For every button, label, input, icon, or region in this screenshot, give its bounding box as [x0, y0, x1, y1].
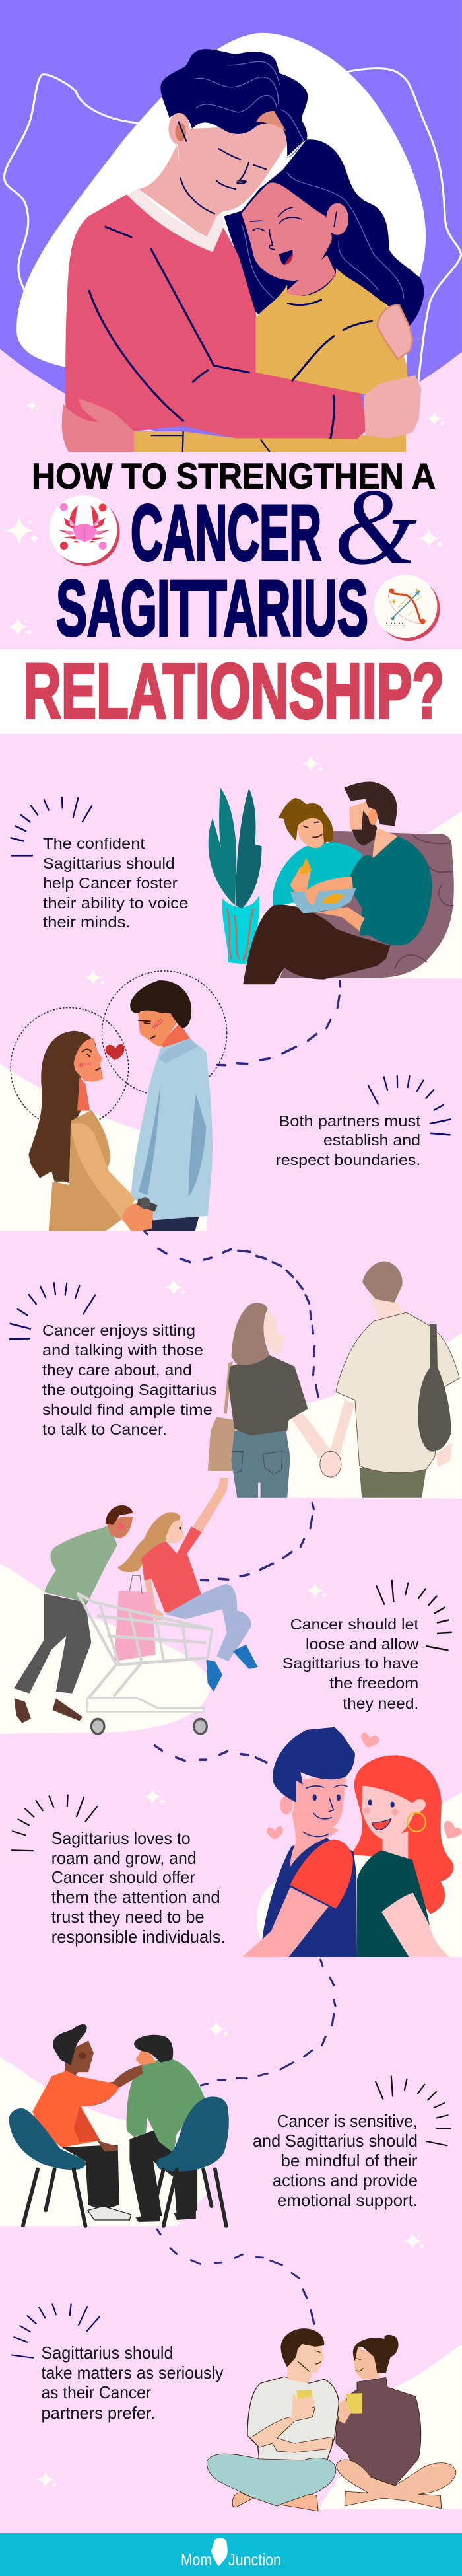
text block 4	[282, 1616, 419, 1712]
woman's sweater	[336, 2377, 421, 2486]
man's feet	[232, 2493, 318, 2511]
text block 3: Cancer enjoys sitting	[42, 1322, 195, 1339]
bow string	[388, 594, 421, 624]
man's forehead shading	[256, 111, 286, 131]
cream wave	[287, 1333, 462, 1499]
watch	[137, 1198, 158, 1212]
text block 4: they need.	[343, 1695, 418, 1712]
stray hair strand	[407, 277, 423, 323]
scene 3: couple holding hands seen from behind	[208, 1261, 462, 1499]
dashed connector 5	[201, 1960, 335, 2085]
title line 1: HOW TO STRENGTHEN A	[32, 456, 436, 497]
dashed connector 6	[157, 2229, 314, 2324]
streaks	[398, 593, 422, 616]
woman's mouth	[372, 1819, 391, 1830]
pants left	[62, 2145, 119, 2211]
man's face lines	[304, 1785, 347, 1837]
chip	[299, 858, 312, 874]
text block 6: be mindful of their	[280, 2151, 418, 2170]
text block 3	[42, 1322, 217, 1438]
hero illustration: embracing couple	[0, 0, 462, 452]
woman's neck	[382, 1831, 408, 1860]
heart	[106, 1044, 124, 1060]
bow arrow	[391, 592, 419, 619]
woman's smile	[356, 2359, 363, 2371]
woman's facial lines	[250, 207, 337, 249]
man's neck and face	[373, 828, 398, 858]
crab claws and legs	[59, 505, 110, 543]
white outline right	[343, 69, 461, 382]
man's neck	[139, 145, 227, 238]
woman's hand and mug	[346, 2393, 362, 2414]
text block 1: their minds.	[43, 913, 131, 931]
man's ear	[168, 1009, 176, 1024]
sun rays: block 2	[368, 1076, 451, 1135]
woman's top	[141, 1526, 202, 1614]
woman's arm down	[145, 1579, 164, 1621]
pot	[222, 895, 259, 964]
heart right	[444, 1821, 462, 1839]
plant leaves	[209, 787, 236, 905]
man's overalls	[262, 1837, 357, 1957]
shoe	[88, 2206, 131, 2220]
bow	[391, 590, 420, 622]
text block 2: establish and	[323, 1131, 420, 1149]
man's hair	[362, 1261, 403, 1303]
sparkle: scene 1	[301, 754, 323, 773]
right pants feet	[135, 2207, 196, 2222]
man's hair	[130, 980, 191, 1028]
text block 5: responsible individuals.	[51, 1927, 226, 1947]
man's ear	[280, 1796, 293, 1814]
pants right	[129, 2129, 197, 2219]
right chair	[156, 2096, 229, 2172]
cart base	[87, 1698, 203, 1712]
text block 7	[41, 2343, 223, 2423]
heart left	[267, 1826, 283, 1840]
text block 5: Cancer should offer	[51, 1867, 195, 1887]
man's collar	[127, 188, 223, 252]
man's shirt	[131, 1038, 213, 1220]
left person arm on shoulder	[77, 2065, 143, 2106]
woman's sweater lower	[134, 427, 406, 452]
left person hair	[53, 2024, 87, 2065]
woman's face	[298, 818, 324, 848]
text block 5: Sagittarius loves to	[51, 1828, 191, 1848]
sparkle: scene 7 bottom	[36, 2470, 58, 2489]
woman's hair	[279, 798, 333, 843]
logo icon: mother and child	[211, 2538, 228, 2566]
text block 2	[275, 1112, 421, 1168]
man's shirt	[44, 1525, 117, 1604]
man's hand on shoulder	[377, 305, 412, 359]
text block 5: them the attention and	[51, 1887, 220, 1907]
man's left arm	[330, 1400, 355, 1468]
text block 1: their ability to voice	[43, 894, 189, 912]
right person sweater	[127, 2058, 205, 2153]
man's hair	[273, 1727, 355, 1803]
scene 6: friends on chairs	[0, 2024, 229, 2226]
stars	[391, 588, 419, 604]
man's hand	[292, 2394, 315, 2417]
dotted circle right	[102, 971, 227, 1096]
text block 6: emotional support.	[277, 2190, 418, 2210]
man's arm	[242, 1887, 329, 1957]
cream wave	[257, 1791, 462, 1957]
sofa	[280, 831, 454, 978]
dashed connector 1	[217, 981, 341, 1065]
woman's arm	[71, 1123, 135, 1222]
woman's ear	[326, 203, 348, 235]
text block 1: The confident	[43, 835, 145, 852]
jeans pockets	[233, 1451, 282, 1474]
text block 3: to talk to Cancer.	[42, 1421, 167, 1438]
title ampersand: &	[334, 466, 417, 587]
text block 5	[51, 1828, 226, 1947]
woman's top	[228, 1355, 308, 1435]
man's hand at the bottom	[364, 375, 421, 438]
scene 1: couple on sofa	[209, 782, 462, 984]
man's arm	[250, 2407, 333, 2452]
man's face	[177, 123, 286, 211]
text block 1: help Cancer foster	[43, 875, 178, 892]
woman's top	[273, 843, 362, 907]
text block 5: roam and grow, and	[51, 1848, 197, 1868]
logo text: Mom	[181, 2550, 212, 2569]
man's ear	[368, 808, 378, 825]
white blob	[16, 33, 426, 367]
text block 3: they care about, and	[42, 1361, 192, 1378]
text block 7: take matters as seriously	[41, 2363, 223, 2382]
woman's face	[362, 1786, 418, 1841]
shopping bag	[114, 1591, 156, 1661]
woman's jeans	[231, 1429, 290, 1498]
man's facial lines	[179, 122, 266, 213]
hands	[122, 1203, 153, 1231]
woman's face and hand	[262, 1309, 277, 1353]
dashed connector 4	[154, 1746, 267, 1762]
sun rays: block 5	[12, 1795, 97, 1851]
collar	[159, 1038, 197, 1063]
man's neck	[290, 1812, 339, 1867]
text block 4: Sagittarius to have	[282, 1655, 418, 1672]
woman's arm raised	[193, 1478, 228, 1532]
sparkle: title right	[418, 527, 444, 550]
man's sleeve	[290, 1840, 353, 1909]
woman's jeans	[165, 1584, 251, 1661]
cream wave	[259, 811, 462, 979]
title block	[32, 456, 436, 653]
man's neck	[370, 1296, 404, 1319]
text block 6: Cancer is sensitive,	[277, 2111, 418, 2131]
sparkle: scene 7 top	[403, 2231, 425, 2251]
man's hair	[160, 49, 308, 156]
crab body	[73, 524, 97, 542]
sparkle: scene 6	[207, 2019, 229, 2039]
man's smile	[298, 2351, 321, 2371]
left hand	[97, 2141, 118, 2151]
man's face	[138, 1003, 177, 1047]
man's facial features	[139, 1020, 156, 1038]
text block 4: the freedom	[329, 1674, 418, 1692]
man's beard	[352, 811, 377, 846]
scene 2: couple with heart	[0, 971, 227, 1231]
woman's eyes	[368, 1799, 372, 1805]
clasped hands	[320, 1451, 341, 1477]
text block 7: partners prefer.	[41, 2403, 155, 2423]
sparkle: scene 4	[305, 1581, 327, 1600]
title word: cancer: CANCER	[131, 489, 321, 577]
text block 6	[253, 2111, 418, 2210]
woman's arm	[381, 1893, 449, 1957]
man's face	[293, 1773, 346, 1832]
left person sweater	[32, 2071, 119, 2147]
man's neck and face	[286, 2349, 312, 2383]
purple backdrop	[0, 0, 462, 441]
man's hair	[280, 2328, 324, 2367]
sweater fold lines	[89, 227, 372, 438]
woman's hair	[231, 1303, 269, 1365]
man's pants	[360, 1468, 426, 1498]
woman's shoes	[233, 1645, 258, 1669]
footer band	[0, 2533, 462, 2576]
man's legs	[207, 2454, 336, 2506]
woman's hair back	[28, 1031, 96, 1183]
text block 3: should find ample time	[42, 1401, 213, 1418]
text block 1	[43, 835, 189, 931]
dotted circle left	[11, 1008, 129, 1127]
right person head	[135, 2050, 156, 2065]
text block 3: the outgoing Sagittarius	[42, 1381, 217, 1398]
woman's handbag	[208, 1417, 236, 1471]
sparkle: scene 5	[143, 1787, 165, 1807]
text block 4: Cancer should let	[290, 1616, 419, 1633]
sparkle: title left lower	[7, 616, 32, 638]
dashed connector 2	[145, 1231, 318, 1397]
cream wave	[0, 2057, 206, 2226]
woman's face	[354, 2347, 380, 2379]
scene 5: back-to-back couple	[242, 1727, 462, 1957]
sun rays: block 4	[376, 1581, 451, 1650]
woman's facial features	[82, 1050, 100, 1070]
woman's facial features	[304, 822, 321, 838]
cream wave	[0, 1563, 212, 1734]
logo text second part: Junction	[228, 2550, 281, 2569]
man's head	[106, 1517, 133, 1538]
man's hair	[344, 782, 397, 826]
woman's mouth	[279, 250, 292, 265]
icon: sagittarius bow badge	[374, 575, 440, 641]
cream wave	[0, 1063, 212, 1231]
woman's hair	[224, 139, 423, 326]
crab leg highlights	[66, 520, 102, 534]
left person head	[65, 2040, 94, 2077]
hair lines	[195, 61, 304, 157]
man's ear	[168, 113, 189, 145]
cream wave	[318, 2344, 462, 2509]
man's bag	[418, 1324, 451, 1452]
woman's hair	[118, 1512, 180, 1572]
icon: cancer crab badge	[49, 495, 120, 566]
sleeve over lower sweater	[183, 389, 366, 439]
woman's neck	[77, 1077, 90, 1111]
man's sweater	[65, 194, 366, 439]
man's right hand	[436, 1443, 452, 1467]
dashed connector 3	[201, 1503, 314, 1581]
chair legs	[23, 2169, 226, 2226]
sparkle: scene 2	[83, 968, 106, 987]
text block 2: Both partners must	[279, 1112, 421, 1129]
man's legs	[14, 1594, 91, 1694]
sparkle: title left upper	[3, 515, 40, 546]
band: relationship heading	[0, 648, 462, 735]
woman's legs	[337, 2460, 456, 2509]
left chair	[9, 2108, 86, 2170]
woman's sweater	[49, 1110, 129, 1231]
woman's face	[74, 1038, 103, 1081]
man's neck	[160, 1023, 190, 1050]
woman's sweater	[255, 268, 408, 394]
bag handles	[129, 1575, 142, 1594]
text block 3: and talking with those	[42, 1342, 203, 1359]
woman's hand on back	[62, 398, 134, 452]
text block 5: trust they need to be	[51, 1907, 205, 1927]
man's boots	[14, 1698, 82, 1723]
sparkle: hero left	[26, 400, 40, 411]
man's arm	[305, 877, 353, 905]
woman's hair strands	[242, 172, 404, 299]
sun rays: block 7	[12, 2304, 100, 2358]
woman's neck	[287, 255, 336, 297]
woman's hair	[353, 2335, 399, 2373]
sun rays: block 1	[11, 797, 92, 855]
text block 7: Sagittarius should	[41, 2343, 173, 2363]
dots	[386, 623, 406, 626]
heart top	[361, 1733, 380, 1748]
text block 4: loose and allow	[306, 1635, 419, 1653]
white outline left	[5, 75, 141, 290]
sparkle: scene 3	[164, 1277, 186, 1297]
woman's ear and earring	[412, 1799, 426, 1813]
woman's arm	[290, 1413, 341, 1476]
shopping cart	[78, 1594, 212, 1713]
man's sweater	[348, 836, 432, 945]
crab shells	[60, 503, 68, 511]
woman's top	[357, 1850, 430, 1957]
woman's arm	[290, 867, 311, 892]
trousers	[243, 905, 390, 984]
sun rays: block 3	[10, 1283, 95, 1339]
scene 7: couple sitting with mugs	[207, 2328, 462, 2511]
text block 1: Sagittarius should	[43, 855, 175, 872]
text block 2: respect boundaries.	[275, 1151, 420, 1168]
man's tee	[248, 2377, 339, 2460]
scene 4: couple with shopping cart	[0, 1478, 258, 1734]
woman's face	[242, 182, 332, 281]
sun rays: block 6	[376, 2076, 451, 2145]
cart wheels	[91, 1719, 104, 1734]
lower yellow sweater lines	[151, 431, 269, 452]
man's pants	[145, 1215, 199, 1231]
text block 7: as their Cancer	[41, 2382, 151, 2402]
sparkle: hero right	[426, 410, 446, 427]
text block 6: actions and provide	[273, 2170, 418, 2190]
bowl	[290, 888, 356, 913]
text block 6: and Sagittarius should	[253, 2131, 418, 2151]
woman's face	[166, 1520, 184, 1544]
man's shirt	[336, 1312, 459, 1473]
man's mug	[297, 2390, 312, 2400]
woman's hair	[350, 1755, 454, 1914]
